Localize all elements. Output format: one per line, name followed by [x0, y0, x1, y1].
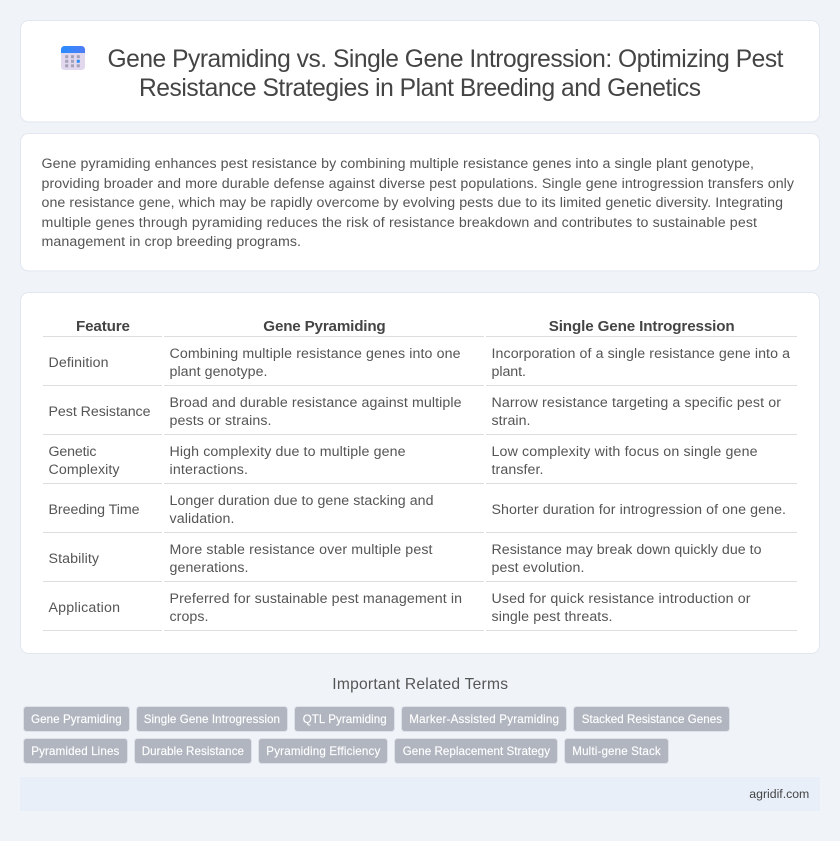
table header row: Single Gene Introgression: [549, 318, 735, 335]
table row: Genetic Complexity: interactions.: [170, 462, 248, 478]
table row: Breeding Time: validation.: [170, 511, 234, 527]
tag: Gene Pyramiding: [24, 706, 130, 732]
tag: Gene Pyramiding: Gene Pyramiding: [31, 713, 122, 726]
table row: Definition: Incorporation of a single resistance gene into a: [492, 346, 790, 362]
table row: Genetic Complexity: Complexity: [48, 462, 120, 478]
tag: Stacked Resistance Genes: [574, 706, 730, 732]
table row: Genetic Complexity: Genetic: [48, 444, 96, 460]
table row: Genetic Complexity: [43, 444, 797, 484]
table row: Pest Resistance: strain.: [492, 413, 530, 429]
table row: Pest Resistance: Broad and durable resistance against multiple: [170, 395, 462, 411]
tag: Pyramided Lines: Pyramided Lines: [31, 745, 120, 758]
tag: Stacked Resistance Genes: Stacked Resistance Genes: [582, 713, 722, 726]
table row: Application: Preferred for sustainable pest management in: [170, 591, 462, 607]
tag: Single Gene Introgression: Single Gene Introgression: [144, 713, 280, 726]
tag: Durable Resistance: Durable Resistance: [142, 745, 244, 758]
panel: comparison table: [20, 292, 820, 654]
table row: Stability: More stable resistance over multiple pest: [170, 542, 433, 558]
tag: Marker-Assisted Pyramiding: Marker-Assisted Pyramiding: [409, 713, 559, 726]
table row: Application: Used for quick resistance introduction or: [492, 591, 751, 607]
table row: Definition: Combining multiple resistance genes into one: [170, 346, 461, 362]
table header row: Gene Pyramiding: [263, 318, 386, 335]
title: Gene Pyramiding vs. Single Gene Introgression: Optimizing Pest: [108, 46, 784, 73]
tag: QTL Pyramiding: QTL Pyramiding: [303, 713, 387, 726]
tag: Durable Resistance: [134, 738, 252, 764]
table row: Genetic Complexity: High complexity due to multiple gene: [170, 444, 406, 460]
table row: Stability: Resistance may break down quickly due to: [492, 542, 762, 558]
table row: Breeding Time: Longer duration due to gene stacking and: [170, 493, 434, 509]
table row: Stability: pest evolution.: [492, 560, 584, 576]
table row: Definition: Definition: [48, 355, 108, 371]
table row: Application: single pest threats.: [492, 609, 612, 625]
footer source text: agridif.com: [749, 787, 809, 801]
text block: summary paragraph: one resistance gene, which may be rapidly overcome by evolving pests due to its limited genetic diversity. Integrating: [42, 195, 783, 211]
title: [108, 46, 784, 102]
tag: Gene Replacement Strategy: Gene Replacement Strategy: [403, 745, 550, 758]
table row: Pest Resistance: [43, 395, 797, 435]
tag: Multi-gene Stack: [564, 738, 668, 764]
table row: Pest Resistance: Pest Resistance: [48, 404, 151, 420]
table header row: [43, 318, 797, 337]
table row: Definition: plant genotype.: [170, 364, 268, 380]
table row: Breeding Time: [43, 493, 797, 533]
tag: QTL Pyramiding: [294, 706, 394, 732]
table row: Application: Application: [48, 600, 120, 616]
heading: important related terms: Important Related Terms: [332, 676, 508, 693]
table row: Pest Resistance: Narrow resistance targeting a specific pest or: [492, 395, 781, 411]
footer bar: [20, 777, 820, 811]
tag: Gene Replacement Strategy: [394, 738, 558, 764]
text block: summary paragraph: multiple genes through pyramiding reduces the risk of resistance breakdown and contributes to sustainable pest: [42, 215, 757, 231]
table row: Breeding Time: Shorter duration for introgression of one gene.: [492, 502, 786, 518]
table row: Definition: [43, 346, 797, 386]
tag: Pyramiding Efficiency: [258, 738, 388, 764]
text block: summary paragraph: Gene pyramiding enhances pest resistance by combining multiple resistance genes into a single plant genotype,: [42, 156, 754, 172]
table row: Application: [43, 591, 797, 631]
panel: title card: [20, 20, 820, 122]
text block: summary paragraph: [42, 156, 795, 250]
table row: Stability: [43, 542, 797, 582]
panel: summary card: [20, 134, 820, 271]
text block: summary paragraph: providing broader and more durable defense against diverse pest populations. Single gene introgression transfers only: [42, 176, 795, 192]
table header row: Feature: [76, 318, 130, 335]
table row: Pest Resistance: pests or strains.: [170, 413, 272, 429]
tag: Marker-Assisted Pyramiding: [402, 706, 566, 732]
text block: summary paragraph: management in crop breeding programs.: [42, 234, 301, 250]
tag: Pyramided Lines: [24, 738, 128, 764]
icon: calendar: [61, 46, 85, 70]
title: Resistance Strategies in Plant Breeding and Genetics: [139, 75, 701, 102]
tag: Multi-gene Stack: Multi-gene Stack: [572, 745, 661, 758]
tags: related terms: [24, 706, 730, 764]
table row: Stability: Stability: [48, 551, 100, 567]
table row: Genetic Complexity: Low complexity with focus on single gene: [492, 444, 758, 460]
table row: Breeding Time: Breeding Time: [48, 502, 140, 518]
table row: Definition: plant.: [492, 364, 526, 380]
table row: Stability: generations.: [170, 560, 248, 576]
tag: Single Gene Introgression: [136, 706, 288, 732]
table row: Application: crops.: [170, 609, 208, 625]
tag: Pyramiding Efficiency: Pyramiding Efficiency: [266, 745, 381, 758]
table row: Genetic Complexity: transfer.: [492, 462, 544, 478]
